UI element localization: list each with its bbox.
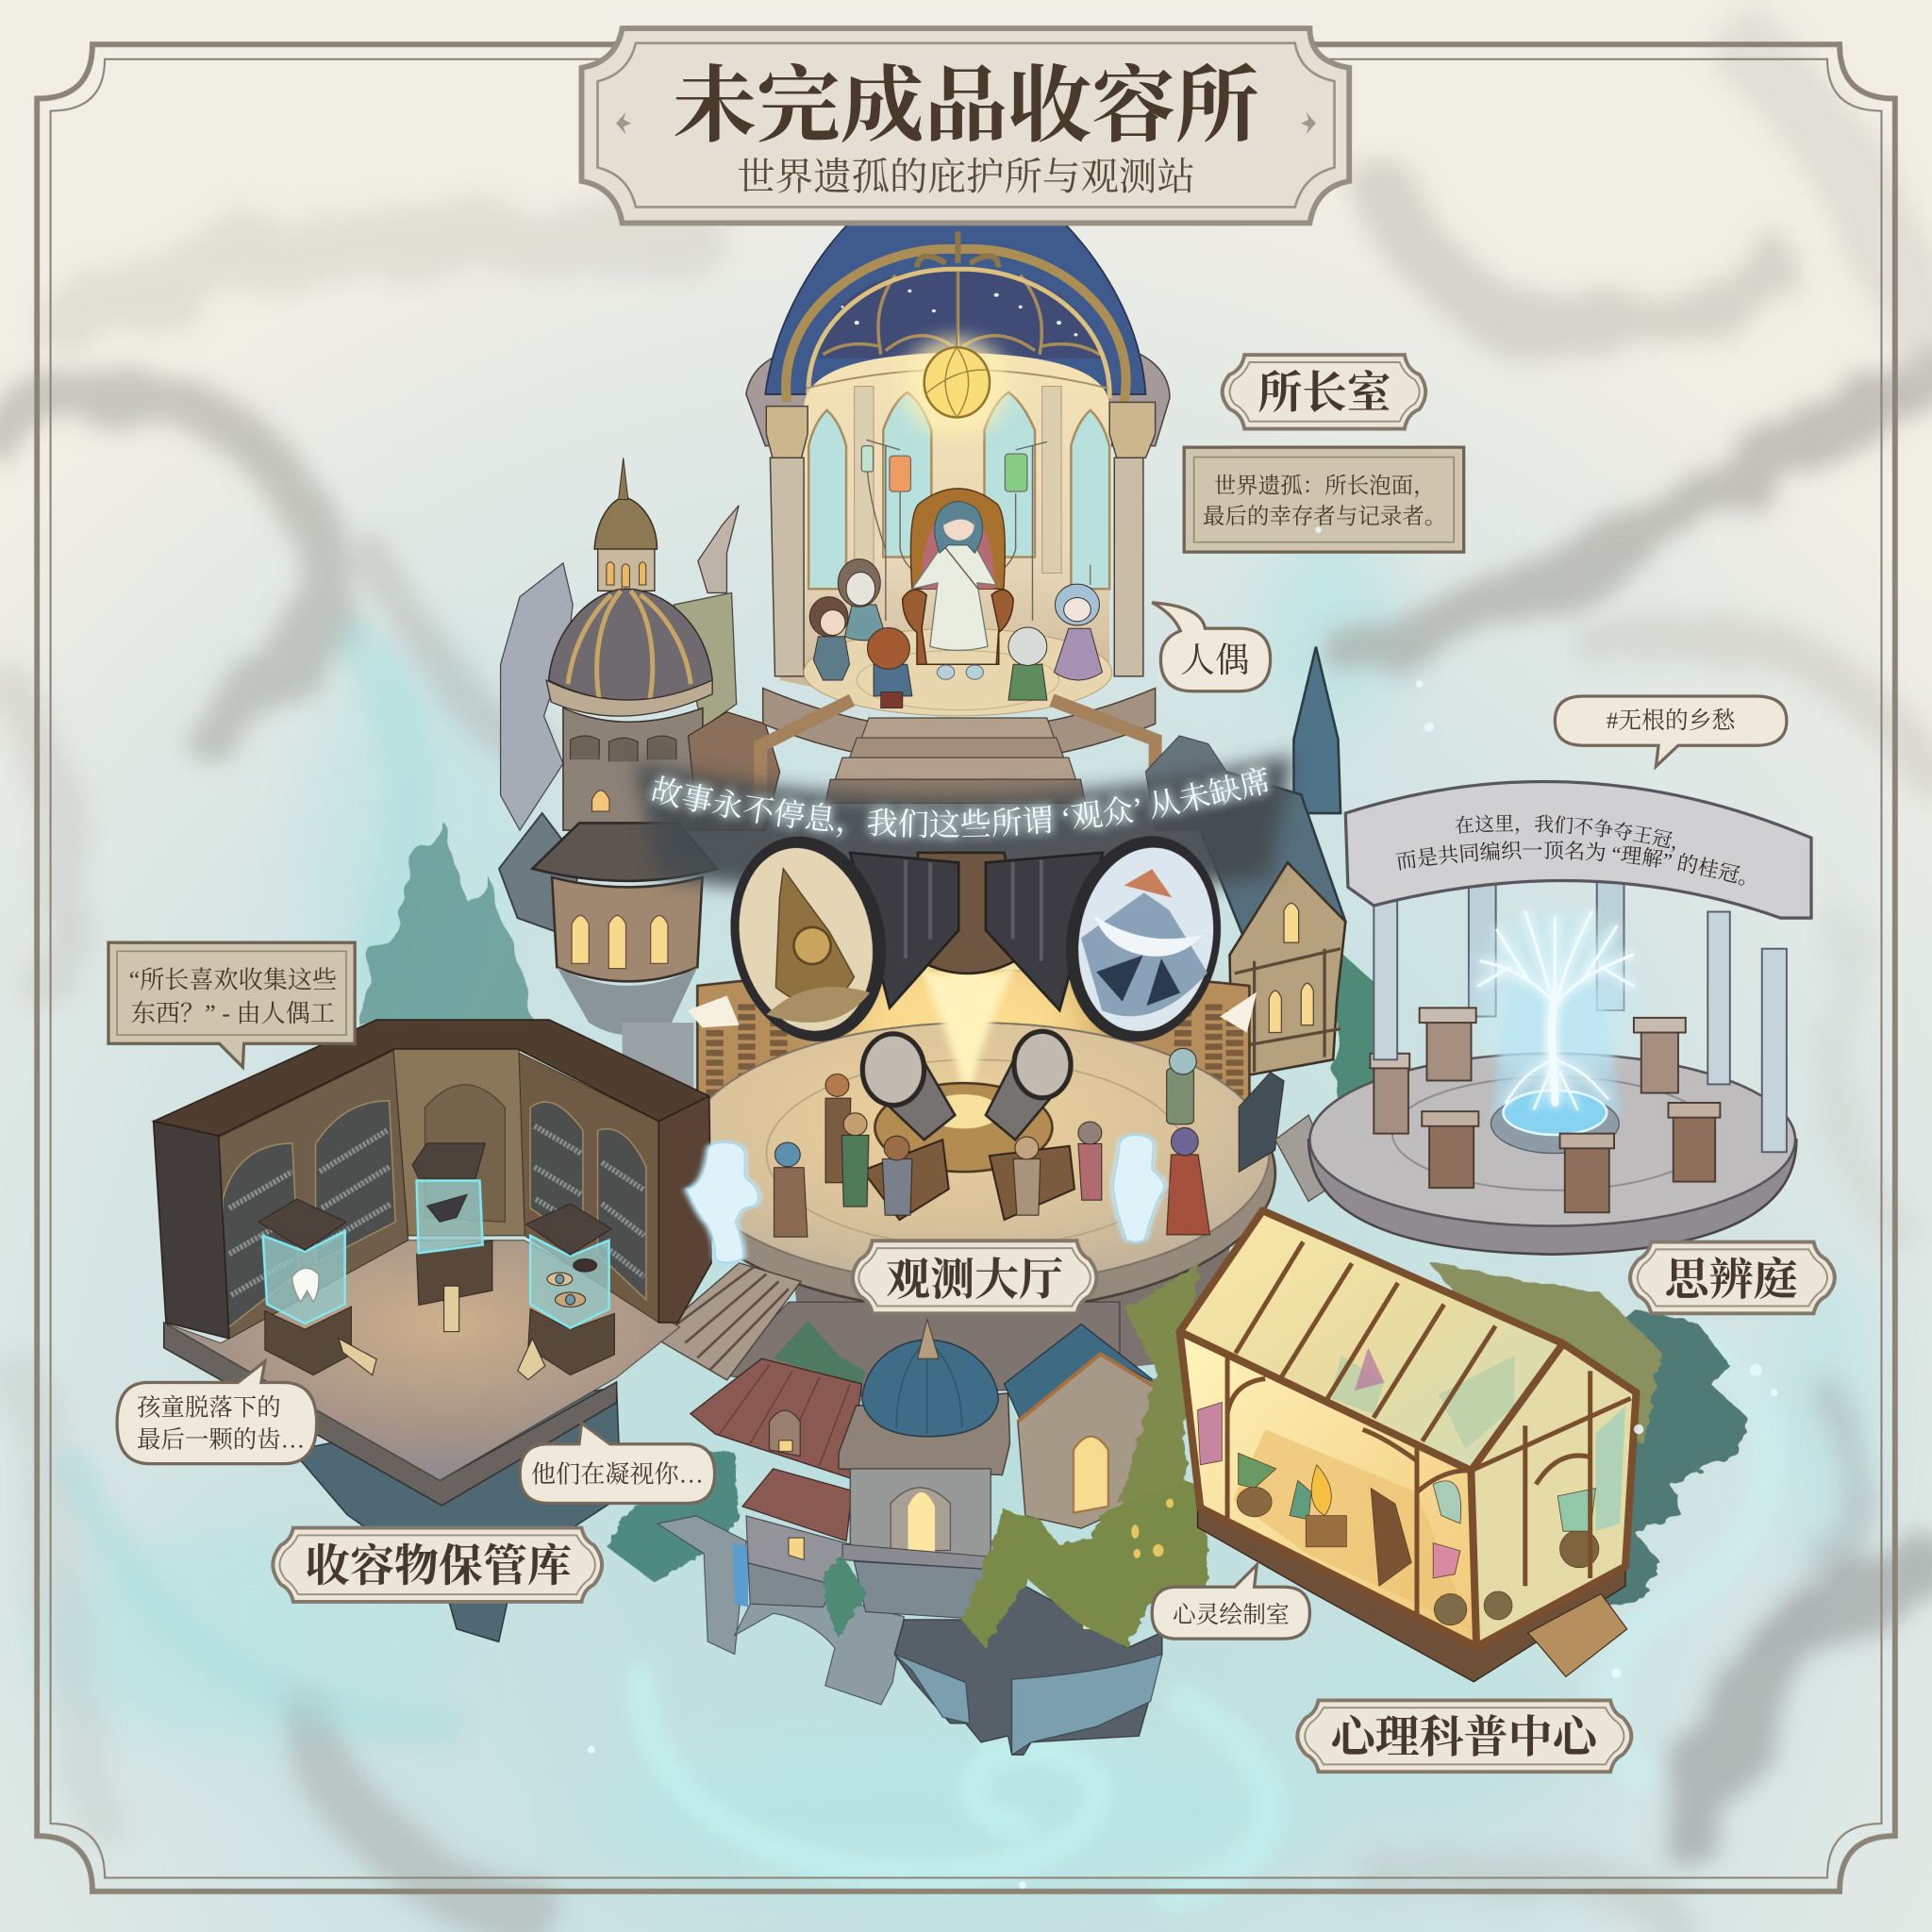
info panel: 所长: 世界遗孤：所长泡面，: [1214, 473, 1436, 498]
label: 心理科普中心: [1297, 1700, 1631, 1772]
left tower: [501, 458, 780, 830]
round floor: [683, 1023, 1269, 1284]
balcony: [842, 1544, 991, 1570]
base: [1197, 1509, 1625, 1682]
round lower base: [894, 1579, 1162, 1755]
right chapel roof: [1004, 1324, 1162, 1419]
bubble: 心灵绘制室: [1152, 1565, 1309, 1639]
tan coat: [1013, 1158, 1041, 1215]
small roof: [742, 1469, 852, 1541]
banner line one: 在这里，我们不争夺王冠，: [1456, 814, 1675, 852]
cupola windows: [607, 562, 646, 587]
hall visitors: [774, 1048, 1284, 1237]
floor lines: [766, 1059, 1185, 1247]
wall tops: [154, 1020, 709, 1136]
stairs: [825, 718, 1086, 804]
ghost visitors: [687, 1135, 1164, 1262]
green coat: [841, 1135, 869, 1207]
panel: 人偶工 quote: [108, 942, 355, 1067]
big telescopes: [688, 822, 1257, 1056]
info panel: 所长: [1184, 447, 1464, 552]
right lens: [1050, 824, 1237, 1054]
IV bags: [861, 446, 1027, 491]
door glow: [908, 1492, 935, 1552]
label: 心理科普中心: 心理科普中心: [1331, 1713, 1603, 1762]
finial: [918, 1320, 939, 1358]
vault underside: [292, 1387, 621, 1641]
holographic cone: [1491, 986, 1622, 1115]
ruined wall left: [501, 563, 573, 830]
chapel wall: [850, 1469, 991, 1557]
orange-haired: [825, 1098, 851, 1183]
banner line two: 而是共同编织一顶名为 “理解” 的桂冠。: [1396, 841, 1744, 886]
label: 思辨庭: [1630, 1242, 1835, 1313]
right gabled house: [1168, 647, 1345, 1078]
vault slab: [164, 1323, 617, 1506]
dormer window: [779, 1441, 792, 1452]
left pier: [658, 1516, 746, 1655]
rubble: [689, 712, 780, 830]
vault stairs: [653, 1263, 801, 1380]
hall under wall: [789, 1232, 1232, 1372]
lower house wall: [746, 1516, 850, 1585]
end wall teal: [1595, 1407, 1625, 1531]
central glow: [832, 937, 1103, 1109]
terracotta roof: [691, 1358, 861, 1478]
director's room tower: [746, 216, 1226, 830]
right barrel: [986, 853, 1103, 1010]
dome ribs: [896, 1341, 962, 1434]
small telescopes and console: [862, 1031, 1074, 1220]
entry steps: [1528, 1594, 1627, 1676]
end wall: [1471, 1343, 1636, 1646]
bookcases: [223, 1101, 646, 1332]
label: 收容物保管库: [273, 1528, 602, 1602]
base ring: [763, 688, 1156, 763]
bubble: 牙齿: 孩童脱落下的: [137, 1394, 281, 1422]
left lens: [712, 822, 905, 1056]
blue goblin: [774, 1168, 808, 1237]
bubble: 牙齿: 最后一颗的齿…: [137, 1426, 305, 1454]
plaque outer: [581, 28, 1349, 223]
left ornament: [616, 112, 631, 134]
gable trim: [1018, 1354, 1160, 1422]
panel: 人偶工 quote: 东西？” - 由人偶工: [131, 1000, 335, 1027]
door surround: [891, 1488, 950, 1551]
cupola cap: [594, 497, 657, 549]
teal mist swirls: [74, 641, 1768, 1897]
lower windows: [789, 1538, 804, 1560]
tree base: [1491, 1094, 1619, 1154]
lectern pedestals: [1370, 1008, 1720, 1212]
bubble: 心灵绘制室: 心灵绘制室: [1173, 1602, 1290, 1628]
glowing particles: [588, 526, 1778, 1889]
bubble: 人偶: [1152, 603, 1271, 691]
platform top: [1309, 1054, 1795, 1226]
bubble: 无根的乡愁: #无根的乡愁: [1607, 708, 1736, 734]
label: 观测大厅: [853, 1241, 1096, 1313]
back columns: [1469, 881, 1624, 1017]
main timbers: [1180, 1210, 1636, 1646]
pipe between telescopes: [909, 853, 1025, 974]
main dome: [549, 589, 712, 700]
bubble: 无根的乡愁: [1555, 696, 1787, 766]
side bulges: [746, 355, 1170, 446]
grey coat: [882, 1158, 912, 1215]
centre wall: [393, 1049, 525, 1236]
label: 所长室: 所长室: [1258, 369, 1391, 418]
left barrel ring: [906, 860, 930, 958]
info panel: 所长: 最后的幸存者与记录者。: [1203, 504, 1446, 529]
lower left tower: [499, 813, 717, 1096]
throne cushion: [922, 504, 994, 589]
tower window: [592, 791, 609, 811]
hall foundation wall: [719, 1302, 1120, 1396]
lower ledge: [748, 1563, 835, 1607]
lens rays: [688, 991, 1257, 1033]
observation hall: [676, 937, 1275, 1372]
door panel: [425, 1085, 505, 1222]
back wall shelves: [697, 971, 1249, 1158]
right chapel wall: [1018, 1354, 1160, 1528]
belt: [546, 680, 712, 716]
left barrel: [850, 853, 958, 1008]
green bush: [774, 1321, 866, 1386]
finial: [619, 458, 628, 499]
dome: [861, 1340, 998, 1437]
patchwork: [1167, 1068, 1193, 1124]
vault floor: [164, 1241, 680, 1480]
floor: [804, 628, 1112, 716]
roof flower: [1355, 1347, 1385, 1391]
dark quote band: [635, 754, 1293, 898]
dome ribs: [568, 591, 691, 700]
ivy: [824, 1557, 866, 1639]
dark tree: [1552, 1308, 1747, 1609]
plaque inner line: [597, 43, 1335, 207]
left wall: [219, 1050, 408, 1339]
front glass: [1178, 1332, 1476, 1646]
display case centre: [412, 1143, 492, 1332]
bubble: 牙齿: [117, 1361, 317, 1464]
right end pier: [658, 1096, 711, 1323]
right ornament: [1301, 112, 1316, 134]
throne arms and base: [903, 590, 1013, 664]
right column: [1114, 458, 1143, 676]
label: 收容物保管库: 收容物保管库: [306, 1542, 572, 1591]
warm floor: [1233, 1429, 1471, 1629]
title: 未完成品收容所: [673, 60, 1259, 153]
central flame: [918, 949, 1017, 1109]
stars: [841, 290, 1077, 336]
roof glass: [1184, 1210, 1563, 1471]
right capital: [1109, 402, 1156, 458]
title plaque: [581, 28, 1349, 223]
interior wall: [780, 353, 1109, 700]
dome shell: [765, 216, 1145, 394]
lower village: [608, 1302, 1208, 1755]
sky ribs: [824, 269, 1100, 355]
gold arch: [786, 249, 1126, 402]
front columns: [1374, 899, 1787, 1152]
arch bases: [735, 1585, 904, 1705]
greenhouse: [1119, 1210, 1747, 1682]
display case tooth: [258, 1199, 376, 1375]
small base window: [1083, 1601, 1096, 1629]
throne back: [910, 489, 1005, 589]
lamp: [924, 271, 990, 417]
rubble right: [1145, 736, 1226, 830]
bubble: 凝视: [520, 1424, 715, 1503]
left foliage: [608, 1450, 739, 1582]
banner arch: [1345, 781, 1811, 918]
plants and pots: [1197, 1402, 1599, 1625]
stained windows: [808, 392, 1109, 589]
IV stands and tubes: [866, 440, 1047, 621]
left column: [770, 458, 804, 676]
display case eyes: [518, 1204, 614, 1380]
panel: 人偶工 quote: “所长喜欢收集这些: [129, 967, 337, 994]
drum: [839, 1393, 1010, 1475]
left end pier: [154, 1122, 229, 1339]
yellow leaves: [1131, 1499, 1174, 1558]
scrolls: [917, 231, 999, 267]
right barrel ring: [1013, 860, 1041, 961]
cupola drum: [598, 549, 655, 591]
broken spire: [698, 506, 739, 592]
interior band: [807, 370, 1108, 389]
label: 观测大厅: 观测大厅: [886, 1257, 1063, 1306]
roof plants: [1330, 1356, 1514, 1449]
roof tiles: [719, 1365, 850, 1466]
blue sliver: [733, 1542, 748, 1607]
teal halos: [37, 518, 1885, 1897]
carved base: [854, 1561, 989, 1618]
lamp glow: [903, 337, 1008, 436]
left capital: [766, 407, 808, 458]
body: [563, 708, 703, 830]
pavilion steps: [1275, 1115, 1337, 1201]
label: 所长室: [1223, 355, 1425, 429]
inner colonnettes: [855, 387, 874, 573]
bubble: 人偶: 人偶: [1180, 641, 1249, 679]
ruined wall right: [674, 592, 737, 728]
pink coat: [1078, 1143, 1102, 1200]
subtitle: 世界遗孤的庇护所与观测站: [737, 156, 1195, 198]
dormer: [770, 1410, 800, 1457]
caped figure: [1239, 1073, 1284, 1172]
secondary timbers: [1227, 1241, 1591, 1617]
label: 思辨庭: 思辨庭: [1665, 1257, 1798, 1306]
olive foliage: [962, 1475, 1208, 1648]
background trees: [358, 820, 1392, 1109]
thinking court pavilion: [1274, 779, 1813, 1256]
right wall: [519, 1053, 658, 1323]
director figure: [912, 502, 996, 679]
platform rim: [1308, 1140, 1796, 1255]
lower base rocks: [1012, 1655, 1162, 1755]
red dress: [1167, 1155, 1210, 1235]
glowing tree: [1478, 912, 1633, 1109]
railings: [760, 700, 1156, 804]
books: [229, 1125, 644, 1295]
floor rim: [676, 1035, 1275, 1311]
olive foliage: [1427, 1261, 1660, 1445]
bubble: 凝视: 他们在凝视你…: [531, 1460, 704, 1488]
sky glass: [818, 269, 1102, 358]
gold arch inner: [808, 269, 1109, 398]
left vines: [1119, 1261, 1200, 1504]
right chapel window: [1074, 1437, 1108, 1513]
arches: [571, 736, 676, 761]
left base rocks: [894, 1655, 970, 1724]
dolls: [809, 559, 1102, 708]
vault room: [154, 1020, 711, 1641]
